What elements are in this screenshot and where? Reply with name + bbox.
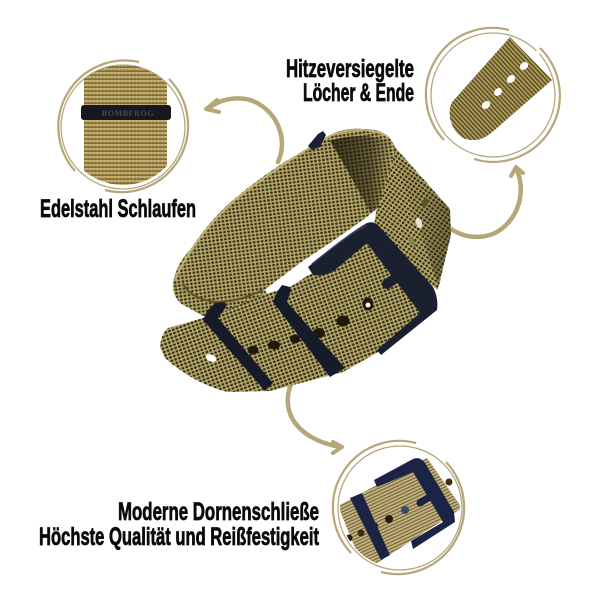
strap keeper right (273, 285, 345, 377)
sealed holes (480, 49, 541, 111)
arrow: buckle (288, 372, 342, 453)
strap close-up (84, 62, 167, 187)
heading: heat sealed: Hitzeversiegelte (286, 55, 414, 83)
detail circle: buckle (333, 441, 464, 574)
buckle close-up (350, 458, 455, 560)
buckle pin (387, 270, 407, 284)
detail circle: steel loops (58, 60, 188, 192)
heading: steel loops: Edelstahl Schlaufen (40, 195, 196, 223)
white gap between bands (263, 208, 378, 291)
steel loop with engraving: BOMBFROG (102, 109, 154, 118)
strap keeper left (203, 302, 273, 391)
rear band (173, 129, 396, 316)
heading: buckle and quality: Moderne Dornenschließe (118, 498, 319, 526)
small keeper top (308, 131, 326, 150)
detail circle: heat sealed end (426, 28, 560, 162)
arrow: loops to strap (206, 98, 282, 162)
buckle (308, 222, 437, 355)
heading: heat sealed (286, 55, 414, 107)
inner band shadow (330, 136, 392, 212)
front strap (160, 243, 428, 392)
right band section (372, 133, 451, 290)
strap end close-up (450, 37, 552, 140)
watch strap product photo (160, 129, 451, 392)
strap close-up with holes (338, 458, 462, 563)
heading: buckle and quality: Höchste Qualität und Reißfestigkeit (39, 523, 319, 551)
arrow: heat sealed end (451, 167, 523, 237)
heading: heat sealed: Löcher & Ende (303, 79, 414, 107)
strap holes (205, 197, 430, 363)
band edge highlight (175, 130, 388, 280)
heading: buckle and quality (39, 498, 319, 551)
